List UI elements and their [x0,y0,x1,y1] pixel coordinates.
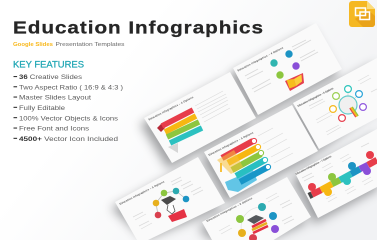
feature: vector icons: 4500+ Vector Icon Included [19,136,118,143]
slide: 6 options hat and books [202,177,311,240]
slide title: Education Infographics – 4 Options [148,95,194,121]
pencil [350,107,358,117]
figure with hat [161,196,176,214]
slide: 4 options with ribbons [144,72,256,163]
icon: purple circle [292,62,300,70]
icon: open book [285,73,304,91]
subtitle: presentation templates: Presentation Templates [56,42,125,48]
slide: 5 options hat and figure [115,157,225,240]
slide title: Education Infographics – 7 Options [295,154,333,176]
title: Education Infographics [13,18,264,38]
slide title: Education Infographics – 6 Options [297,86,335,108]
slide title: Education Infographics – 5 Options [119,179,165,206]
slide: 7 options band [295,129,377,218]
hat cap [217,150,243,174]
feature: free font: Free Font and Icons [19,126,90,133]
tip of pencil [168,143,178,153]
arc [241,207,262,233]
feature: 36 creative slides: 36 Creative Slides [19,74,83,81]
feature: aspect ratio: Two Aspect Ratio ( 16:9 & 4:3 ) [19,84,123,91]
feature: master slides: Master Slides Layout [19,95,91,102]
slide title: Education Infographics – 5 Options [208,130,254,157]
icon: blue circle [285,50,293,58]
ribbon bars [159,110,202,143]
feature list [14,74,123,143]
heading: key features: KEY FEATURES [13,60,84,70]
petals diagram [330,86,366,121]
graduation cap [247,215,264,224]
icon: google slides [349,1,375,27]
connector path [156,191,186,215]
feature: vector objects: 100% Vector Objects & Icons [19,115,119,122]
band segments [309,160,377,196]
bars [222,141,268,182]
tassel [220,163,222,172]
feature: editable: Fully Editable [19,105,65,112]
bumps [308,151,374,196]
steps [153,188,189,218]
slide: 5 options graduation hat [204,105,318,198]
book stack [252,220,268,233]
steps [236,203,279,240]
slide: 6 options central circle [293,58,377,149]
graduation base [225,170,257,192]
slide title: Education Infographics – 4 Options [237,45,284,72]
subtitle: google slides: Google Slides [13,42,53,48]
slide title: Education Infographics – 6 Options [206,196,253,223]
hexagon ends [251,138,271,170]
icon: green circle [276,71,284,79]
icon: teal circle [270,59,278,67]
slide: 4 options with book [233,23,342,115]
red books [168,209,187,222]
